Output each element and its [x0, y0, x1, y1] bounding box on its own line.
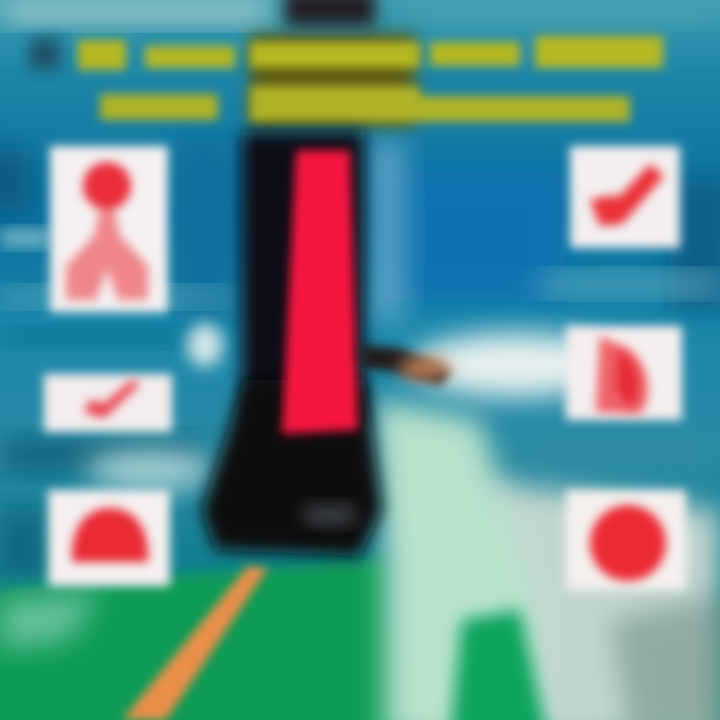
icon: red leaf shape — [596, 336, 648, 414]
sea foam and wave spray — [85, 323, 720, 720]
orange line on deck — [122, 566, 268, 720]
panel: middle left card — [44, 374, 172, 432]
panel: top right card — [570, 146, 680, 248]
icon: check stroke — [84, 380, 140, 418]
title banner — [30, 34, 663, 126]
panel: middle right card — [566, 326, 682, 420]
green wave — [375, 400, 540, 720]
green deck strip, right side — [450, 610, 548, 720]
icon: red dome — [72, 508, 148, 562]
icon: figure — [66, 162, 148, 300]
icon: check mark — [590, 164, 664, 226]
panel: bottom left card — [48, 490, 170, 586]
title line 1 — [78, 36, 663, 70]
arm and hand — [360, 345, 450, 385]
panel: top left card — [50, 146, 168, 312]
panel: bottom right card — [566, 490, 686, 590]
central figure: black suit — [202, 0, 451, 556]
title line 2 — [100, 86, 630, 122]
icon: red circle — [590, 505, 666, 581]
title dark backing — [250, 34, 415, 126]
green deck — [0, 558, 395, 720]
red panel on suit — [282, 150, 358, 434]
